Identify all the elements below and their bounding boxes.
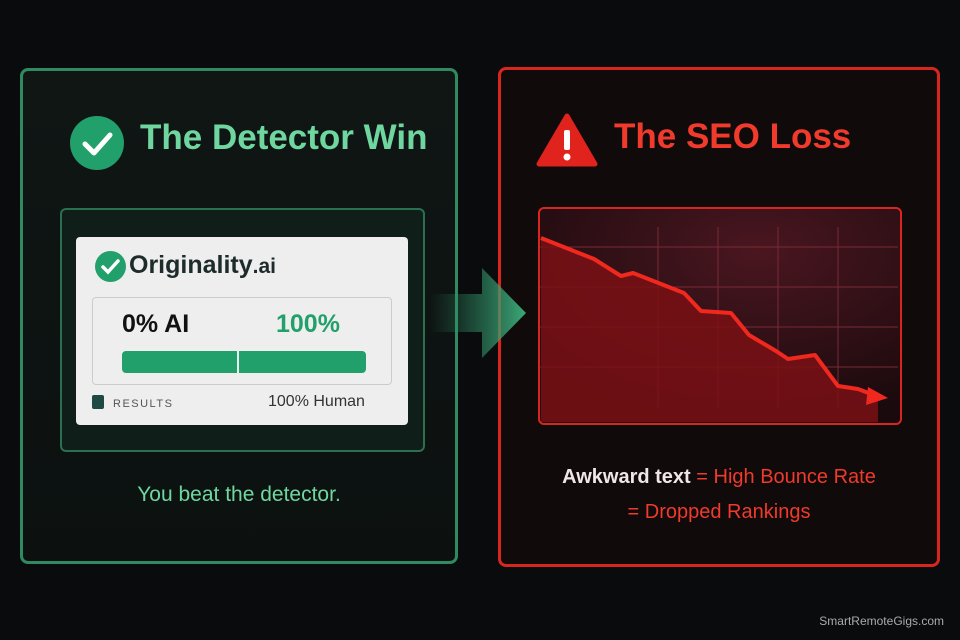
results row <box>92 395 104 409</box>
detector card frame <box>60 208 425 452</box>
panel: SEO loss <box>498 67 940 567</box>
text: consequence: Awkward text = High Bounce Rate <box>562 466 876 488</box>
score box: 100% <box>276 310 340 338</box>
logo: Originality.ai <box>129 251 276 279</box>
score box: 0% AI <box>122 310 189 338</box>
card: Originality.ai result: RESULTS <box>113 398 173 410</box>
card: Originality.ai result <box>76 237 408 425</box>
chart: declining line <box>538 207 902 425</box>
arrow: green <box>436 268 526 358</box>
icon: check circle <box>70 116 124 170</box>
text: consequence: = Dropped Rankings <box>628 501 810 523</box>
caption: You beat the detector. <box>137 483 341 506</box>
progress bar <box>122 351 366 373</box>
text: consequence <box>562 466 876 523</box>
card: Originality.ai result: 100% Human <box>268 393 365 410</box>
panel: detector win <box>20 68 458 564</box>
heading: The SEO Loss: The SEO Loss <box>614 117 851 156</box>
watermark: SmartRemoteGigs.com <box>819 614 944 628</box>
heading: The Detector Win: The Detector Win <box>140 118 428 157</box>
icon: warning <box>536 114 598 166</box>
score box <box>92 297 392 385</box>
